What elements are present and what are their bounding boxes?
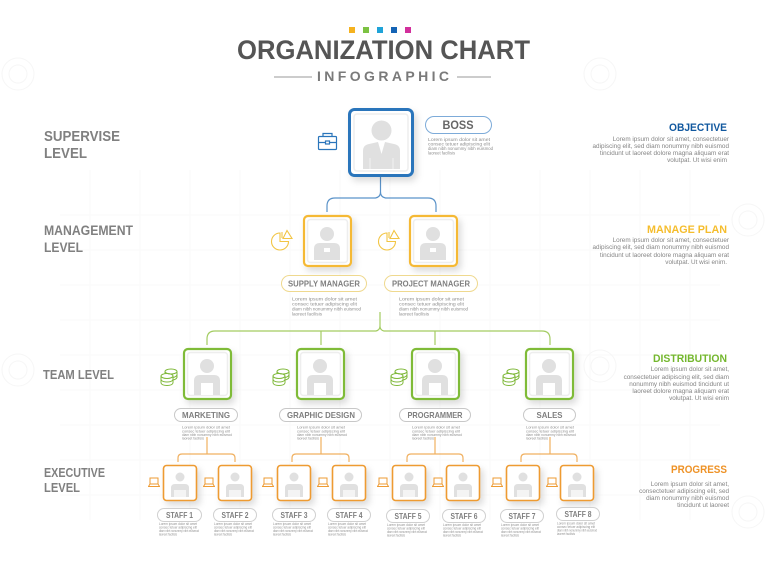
side text: objective: tincidunt ut laoreet dolore magna aliquam erat — [600, 150, 729, 157]
team card: sales — [503, 349, 576, 440]
staff card 1: diam nibh nonummy nibh euismod — [159, 529, 199, 533]
team card: marketing: diam nibh nonummy nibh euismod — [182, 432, 232, 437]
side text: distribution: nonummy nibh euismod tincidunt ut — [629, 381, 729, 388]
icon: coins — [391, 369, 407, 386]
side text: distribution — [624, 353, 729, 402]
staff card 3: Lorem ipsum dolor sit amet — [273, 522, 311, 526]
staff card 1: laoreet facilisis — [159, 532, 177, 536]
boss label: Lorem ipsum dolor sit amet — [428, 137, 491, 143]
staff card 8: diam nibh nonummy nibh euismod — [557, 528, 597, 532]
team card: sales: laoreet facilisis — [526, 436, 548, 440]
staff card 4: Lorem ipsum dolor sit amet — [328, 522, 366, 526]
manager card: project manager: consec tetuer adipiscing elit — [399, 302, 465, 308]
level label: supervise: LEVEL — [44, 146, 87, 162]
level label: supervise: SUPERVISE — [44, 129, 120, 145]
staff card 4: laoreet facilisis — [328, 532, 346, 536]
icon: laptop — [318, 478, 328, 486]
connectors: team to staff — [178, 437, 577, 462]
level label: executive: EXECUTIVE — [44, 466, 105, 480]
side text: objective: adipiscing elit, sed diam nonummy nibh euismod — [593, 143, 729, 150]
staff card 6: Lorem ipsum dolor sit amet — [443, 523, 481, 527]
manager card: project manager: diam nibh nonummy nibh euismod — [399, 306, 468, 312]
title: ORGANIZATION CHART — [237, 35, 530, 65]
boss label: diam nibh nonummy nibh euismod — [428, 146, 493, 152]
manager card: project manager: Lorem ipsum dolor sit amet — [399, 296, 465, 302]
icon: laptop — [262, 478, 274, 486]
team card: graphic design — [273, 349, 362, 440]
staff card 6 — [432, 466, 486, 538]
team card: programmer — [391, 349, 470, 440]
staff card 1: Lorem ipsum dolor sit amet — [159, 522, 197, 526]
staff card 5: Lorem ipsum dolor sit amet — [387, 523, 425, 527]
staff card 5: laoreet facilisis — [387, 534, 405, 538]
icon: pie chart — [272, 230, 292, 250]
side text: manage plan: adipiscing elit, sed diam nonummy nibh euismod — [593, 244, 729, 251]
side text: progress: diam nonummy nibh euismod — [646, 495, 729, 502]
side text: objective: OBJECTIVE — [669, 122, 727, 134]
team card: graphic design: Lorem ipsum dolor sit amet — [297, 424, 346, 430]
side text: distribution: laoreet dolore magna aliquam erat — [632, 388, 729, 395]
manager card: supply manager — [272, 216, 366, 318]
icon: briefcase — [318, 134, 336, 150]
boss label: BOSS — [442, 120, 474, 132]
icon: coins — [161, 369, 177, 386]
side text: manage plan: MANAGE PLAN — [647, 224, 727, 236]
staff card 2: laoreet facilisis — [214, 532, 232, 536]
manager card: project manager: laoreet facilisis — [399, 312, 430, 318]
team card: sales: Lorem ipsum dolor sit amet — [526, 424, 575, 430]
team card: graphic design: diam nibh nonummy nibh euismod — [297, 432, 347, 437]
icon: laptop — [432, 478, 444, 486]
staff card 2 — [204, 466, 256, 536]
staff card 5 — [378, 466, 430, 538]
side text: manage plan: Lorem ipsum dolor sit amet, consectetuer — [613, 237, 729, 244]
staff card 8: consec tetuer adipiscing elit — [557, 525, 595, 529]
side text: progress: consectetuer adipiscing elit, sed — [639, 488, 729, 495]
icon: laptop — [492, 478, 502, 486]
staff card 3 — [262, 466, 316, 536]
icon: laptop — [148, 478, 160, 486]
team card: marketing: Lorem ipsum dolor sit amet — [182, 424, 231, 430]
team card: graphic design: consec tetuer adipiscing elit — [297, 428, 346, 434]
manager card: supply manager: laoreet facilisis — [292, 312, 323, 318]
staff card 5: consec tetuer adipiscing elit — [387, 526, 425, 530]
manager card: supply manager: Lorem ipsum dolor sit amet — [292, 296, 358, 302]
level label: management: MANAGEMENT — [44, 223, 134, 238]
staff card 3: laoreet facilisis — [273, 532, 291, 536]
staff card 8: Lorem ipsum dolor sit amet — [557, 522, 595, 526]
staff card 5: STAFF 5 — [394, 512, 422, 521]
team card: marketing: consec tetuer adipiscing elit — [182, 428, 231, 434]
icon: coins — [273, 369, 289, 386]
staff card 7: Lorem ipsum dolor sit amet — [501, 523, 539, 527]
side text: objective — [593, 122, 729, 164]
team card: marketing: laoreet facilisis — [182, 436, 204, 440]
icon: pie chart — [378, 230, 399, 250]
team card: graphic design: laoreet facilisis — [297, 436, 319, 440]
team card: graphic design: GRAPHIC DESIGN — [287, 410, 355, 420]
staff card 8: laoreet facilisis — [557, 532, 575, 536]
staff card 1: consec tetuer adipiscing elit — [159, 526, 197, 530]
boss label — [426, 116, 493, 156]
side text: manage plan — [593, 224, 729, 266]
staff card 8 — [546, 466, 600, 536]
team card: sales: diam nibh nonummy nibh euismod — [526, 432, 576, 437]
staff card 7: laoreet facilisis — [501, 534, 519, 538]
subtitle: INFOGRAPHIC — [317, 68, 449, 84]
staff card 4: diam nibh nonummy nibh euismod — [328, 529, 368, 533]
side text: distribution: DISTRIBUTION — [653, 353, 727, 365]
icon: laptop — [546, 478, 558, 486]
manager card: supply manager: SUPPLY MANAGER — [288, 278, 360, 288]
side text: manage plan: volutpat. Ut wisi enim. — [665, 259, 727, 266]
side text: distribution: volutpat. Ut wisi enim — [669, 395, 729, 402]
staff card 6: diam nibh nonummy nibh euismod — [443, 530, 483, 534]
staff card 4: STAFF 4 — [336, 511, 363, 520]
side text: distribution: consectetuer adipiscing elit, sed diam — [624, 374, 729, 381]
side text: manage plan: tincidunt ut laoreet dolore magna aliquam erat — [600, 252, 729, 259]
staff card 6: laoreet facilisis — [443, 534, 461, 538]
team card: programmer: consec tetuer adipiscing elit — [412, 428, 461, 434]
icon: laptop — [378, 478, 388, 486]
boss card — [350, 110, 412, 176]
manager card: supply manager: consec tetuer adipiscing elit — [292, 302, 358, 308]
staff card 3: consec tetuer adipiscing elit — [273, 526, 311, 530]
staff card 4: consec tetuer adipiscing elit — [328, 526, 366, 530]
manager card: project manager: PROJECT MANAGER — [392, 278, 470, 288]
team card: marketing — [161, 349, 238, 440]
staff card 1 — [148, 466, 202, 536]
level label: management: LEVEL — [44, 240, 83, 255]
team card: marketing: MARKETING — [182, 410, 230, 420]
team card: programmer: PROGRAMMER — [408, 410, 462, 420]
staff card 4 — [318, 466, 370, 536]
staff card 1: STAFF 1 — [166, 511, 193, 520]
level label: team: TEAM LEVEL — [43, 368, 114, 382]
staff card 7 — [492, 466, 544, 538]
staff card 6: consec tetuer adipiscing elit — [443, 526, 481, 530]
staff card 2: diam nibh nonummy nibh euismod — [214, 529, 254, 533]
manager card: supply manager: diam nibh nonummy nibh euismod — [292, 306, 361, 312]
colour dots — [349, 27, 411, 33]
team card: sales: consec tetuer adipiscing elit — [526, 428, 575, 434]
side text: progress: Lorem ipsum dolor sit amet, — [651, 481, 729, 488]
icon: laptop — [204, 478, 214, 486]
staff card 2: consec tetuer adipiscing elit — [214, 526, 252, 530]
staff card 8: STAFF 8 — [564, 510, 592, 519]
team card: programmer: diam nibh nonummy nibh euismod — [412, 432, 462, 437]
icon: coins — [503, 369, 519, 386]
level label: executive: LEVEL — [44, 481, 80, 495]
side text: progress: tincidunt ut laoreet — [677, 502, 729, 509]
staff card 7: STAFF 7 — [508, 512, 536, 521]
staff card 2: STAFF 2 — [222, 511, 249, 520]
connectors: managers to team — [207, 312, 550, 345]
side text: progress — [639, 464, 729, 509]
staff card 5: diam nibh nonummy nibh euismod — [387, 530, 427, 534]
staff card 7: consec tetuer adipiscing elit — [501, 526, 539, 530]
staff card 2: Lorem ipsum dolor sit amet — [214, 522, 252, 526]
connectors: boss to managers — [327, 176, 436, 212]
team card: programmer: Lorem ipsum dolor sit amet — [412, 424, 461, 430]
side text: progress: PROGRESS — [671, 464, 727, 476]
team card: sales: SALES — [536, 410, 563, 420]
manager card: project manager — [378, 216, 478, 318]
staff card 7: diam nibh nonummy nibh euismod — [501, 530, 541, 534]
staff card 6: STAFF 6 — [450, 512, 478, 521]
team card: programmer: laoreet facilisis — [412, 436, 434, 440]
side text: objective: volutpat. Ut wisi enim — [667, 157, 727, 164]
staff card 3: STAFF 3 — [280, 511, 308, 520]
side text: distribution: Lorem ipsum dolor sit amet, — [651, 366, 729, 373]
boss label: consec tetuer adipiscing elit — [428, 142, 491, 148]
staff card 3: diam nibh nonummy nibh euismod — [273, 529, 313, 533]
side text: objective: Lorem ipsum dolor sit amet, consectetuer — [613, 136, 729, 143]
boss label: laoreet facilisis — [428, 150, 455, 156]
